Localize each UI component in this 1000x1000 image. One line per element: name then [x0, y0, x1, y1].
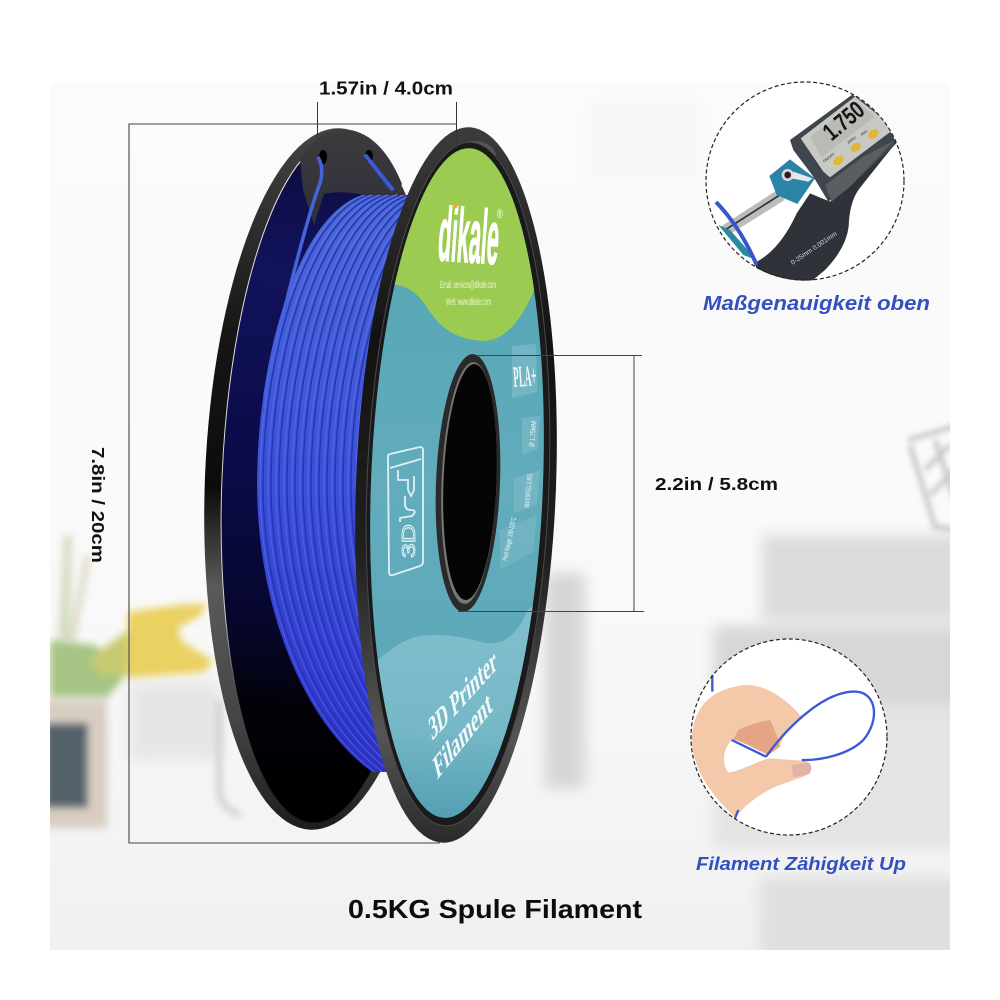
spec box weight: NW:0.5KG(1.1LBS)	[524, 474, 534, 508]
rim slot	[468, 142, 495, 155]
filament hole left	[319, 150, 327, 164]
logo registered mark: ®	[497, 207, 503, 222]
light lower wave	[378, 606, 533, 818]
anvil	[718, 225, 757, 260]
C-frame	[756, 146, 894, 281]
spec box diameter	[522, 416, 540, 454]
micrometer illustration	[716, 93, 903, 287]
finger shading	[733, 720, 780, 755]
rim inner band	[354, 139, 562, 829]
filament sample	[716, 202, 757, 265]
hand holding filament	[692, 675, 874, 818]
yellow buttons	[833, 129, 878, 166]
spool front flange with label: PLA+	[512, 359, 537, 394]
panel: micrometer inset	[706, 82, 904, 287]
spindle	[722, 189, 785, 235]
label: height: 7.8in / 20cm	[88, 447, 108, 563]
caption: toughness: Filament Zähigkeit Up	[696, 854, 906, 874]
logo: dikale	[436, 192, 502, 281]
filament hole right	[365, 150, 373, 162]
background vase	[906, 422, 950, 534]
logo accent dot	[452, 204, 458, 208]
caption: accuracy: Maßgenauigkeit oben	[703, 293, 930, 315]
spec box print range	[500, 515, 537, 570]
housing lower grip	[825, 140, 895, 202]
thumb nail	[792, 763, 811, 777]
dimension line: spool height	[129, 124, 456, 843]
frame engraving: 0-25mm 0.001mm	[790, 230, 839, 267]
button captions: ABS	[860, 129, 869, 137]
spool front flange with label: Email: services@dikale.com	[440, 280, 496, 291]
spec box weight	[514, 470, 540, 513]
green top area	[394, 148, 534, 341]
centre hole	[431, 353, 505, 613]
3D Printer Filament label: 3D Printer	[426, 641, 500, 748]
dashed border	[706, 82, 904, 280]
lcd	[810, 102, 875, 157]
label: hole diameter: 2.2in / 5.8cm	[655, 474, 778, 494]
icon: 3D printer	[388, 447, 423, 575]
lcd reading: 1.750	[818, 97, 870, 146]
spool front flange with label	[355, 127, 557, 843]
spec box print range: Print Range: 190-220°C	[501, 517, 518, 561]
back flange inner face	[208, 133, 446, 827]
paper label	[370, 148, 544, 818]
spool back flange	[190, 123, 460, 835]
dimension line: hole diameter	[458, 356, 644, 612]
lock lever	[782, 169, 813, 182]
spec box PLA+	[512, 344, 537, 398]
filament coil	[257, 195, 408, 772]
button captions: ZERO	[847, 136, 857, 145]
housing	[790, 93, 903, 202]
face plate	[801, 97, 895, 177]
dimension line: spool width	[318, 102, 456, 148]
blue lock block	[769, 159, 815, 204]
button captions: ON/OFF	[822, 152, 836, 163]
button captions	[822, 129, 869, 163]
panel: flexible filament inset	[691, 639, 887, 835]
3D Printer Filament label: Filament	[430, 684, 495, 787]
loose filament strand	[265, 156, 392, 395]
icon: 3D printer: 3D	[399, 524, 419, 558]
spool front flange with label: Web: www.dikale.com	[446, 297, 491, 308]
filament loop	[712, 675, 874, 818]
back flange rim	[190, 123, 460, 835]
3D Printer Filament label	[426, 641, 500, 787]
label: width: 1.57in / 4.0cm	[319, 78, 453, 98]
bottom title: 0.5KG Spule Filament	[348, 894, 642, 924]
hand	[692, 685, 811, 817]
hub spoke at top of back flange	[300, 129, 402, 225]
dashed border	[691, 639, 887, 835]
spec box diameter: Ø 1.75MM	[529, 421, 538, 447]
front flange rim	[343, 124, 569, 846]
